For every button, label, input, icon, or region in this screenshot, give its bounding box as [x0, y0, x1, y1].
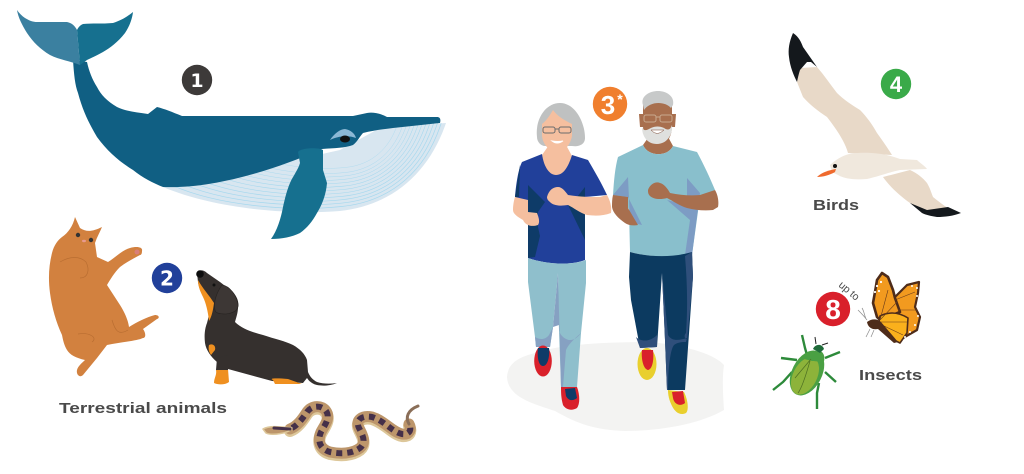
snake pattern — [292, 407, 410, 453]
man glasses — [644, 115, 672, 122]
bird — [789, 33, 961, 217]
dog tan markings — [198, 280, 302, 384]
woman shoes — [534, 346, 579, 410]
snake head — [263, 427, 292, 434]
badge 4: 4 — [890, 72, 903, 97]
bird lower wing tip — [910, 203, 961, 217]
man arms — [612, 182, 718, 225]
belly pleat lines — [172, 123, 441, 208]
man smile — [651, 130, 664, 134]
beetle wing seam — [795, 359, 811, 393]
woman shirt shadows — [515, 165, 585, 258]
man hair — [642, 91, 673, 110]
whale fluke right — [77, 12, 133, 65]
beetle head — [813, 345, 824, 353]
badge 1 — [182, 65, 212, 95]
snake skin — [290, 407, 410, 453]
badge 4 — [881, 69, 911, 99]
butterfly wing edge dots — [874, 281, 919, 338]
whale — [17, 10, 446, 239]
badge 2: 2 — [160, 266, 174, 290]
man shoes — [638, 348, 688, 414]
man neck and head — [639, 100, 676, 154]
man jogging — [612, 91, 718, 414]
woman neck and face — [542, 110, 572, 176]
dog body — [197, 270, 337, 386]
badge 3: * — [617, 91, 623, 107]
bird lower wing — [883, 170, 948, 211]
snake neck marking — [274, 428, 290, 429]
woman arms — [513, 187, 611, 226]
whale pectoral fin — [271, 148, 327, 239]
badge 3 — [593, 87, 627, 121]
bird body — [830, 153, 927, 179]
dog nose — [196, 270, 204, 278]
whale body — [73, 60, 440, 187]
woman pants — [528, 258, 586, 387]
badge 2 — [152, 263, 182, 293]
butterfly veins — [880, 290, 917, 335]
snake — [263, 406, 418, 455]
bird eye — [833, 164, 837, 168]
beetle wing cases — [785, 353, 825, 399]
whale pleated belly — [163, 123, 446, 212]
butterfly upper wing front — [873, 273, 900, 320]
woman shirt — [515, 154, 607, 264]
bird upper wing — [797, 67, 892, 155]
label: birds: Birds — [813, 197, 859, 214]
butterfly — [858, 273, 920, 343]
whale eye — [330, 129, 356, 142]
label: terrestrial animals: Terrestrial animals — [59, 400, 227, 417]
beetle antennae — [815, 337, 828, 345]
bird beak — [817, 169, 836, 177]
woman glasses — [543, 127, 571, 133]
butterfly lower wing — [878, 313, 908, 343]
whale fluke left — [17, 10, 80, 65]
man beard — [642, 125, 672, 144]
beetle legs — [773, 335, 840, 409]
dog — [196, 270, 337, 386]
cat fur lines — [60, 258, 128, 342]
label: insects: Insects — [859, 367, 922, 384]
beetle thorax — [801, 351, 824, 364]
beetle — [773, 335, 840, 409]
badge 8: 8 — [825, 294, 841, 325]
bird upper wing tip — [789, 33, 817, 82]
badge 8 — [816, 292, 850, 326]
floor shadow — [507, 342, 724, 431]
man shirt — [613, 145, 715, 257]
label: up to: up to — [836, 279, 862, 303]
snake tail — [407, 406, 418, 424]
man pants shading — [636, 252, 693, 390]
butterfly body — [867, 319, 898, 343]
butterfly antennae — [858, 308, 874, 337]
badge 1: 1 — [190, 70, 204, 92]
badge 3: 3 — [601, 90, 615, 120]
dog front leg — [216, 355, 228, 370]
woman pants shading — [535, 273, 581, 387]
snake belly — [290, 409, 410, 455]
woman hair — [537, 103, 585, 146]
cat body — [49, 217, 159, 376]
cat face — [76, 233, 140, 254]
cat — [49, 217, 159, 376]
beetle shell — [783, 345, 831, 401]
dog ear — [214, 285, 238, 314]
woman jogging — [513, 103, 611, 410]
woman smile — [552, 141, 563, 143]
butterfly upper wing rear — [890, 282, 920, 338]
man shirt side panels — [613, 177, 700, 255]
dog eye — [212, 284, 216, 286]
man pants — [629, 252, 693, 390]
